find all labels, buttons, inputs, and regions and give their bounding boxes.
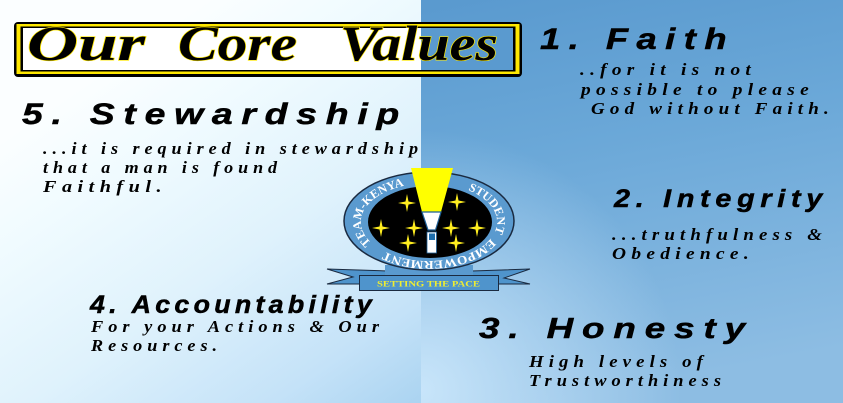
ring lettering: STUDENT: [468, 184, 505, 236]
value 1: Faith: possible to please: [579, 80, 814, 99]
value 2: Integrity: ...truthfulness &: [612, 225, 827, 244]
title text: [27, 15, 498, 71]
value 4: Accountability: 4. Accountability: [89, 291, 376, 319]
title text: Our: [27, 15, 146, 71]
value 1: Faith: ..for it is not: [580, 60, 756, 79]
logo: Student Empowerment Team-Kenya: [326, 168, 530, 291]
value 3: Honesty: High levels of: [528, 352, 708, 371]
value 2: Integrity: [612, 185, 828, 263]
value 1: Faith: God without Faith.: [591, 99, 834, 118]
ring lettering: EMPOWERMENT: [382, 238, 496, 269]
ribbon: [327, 265, 530, 290]
value 2: Integrity: Obedience.: [612, 244, 754, 263]
title text: Core: [178, 15, 297, 71]
flashlight beam: [411, 168, 453, 212]
value 4: Accountability: [89, 291, 384, 355]
value 5: Stewardship: ...it is required in stewardship: [43, 139, 423, 158]
value 1: Faith: [540, 23, 834, 118]
value 4: Accountability: Resources.: [90, 336, 222, 355]
background: left panel: [0, 0, 421, 403]
stars: [372, 193, 486, 252]
background: right panel: [421, 0, 843, 403]
value 5: Stewardship: 5. Stewardship: [22, 98, 408, 131]
title banner: [14, 15, 522, 77]
value 4: Accountability: For your Actions & Our: [90, 317, 384, 336]
title text: Values: [340, 15, 498, 71]
value 5: Stewardship: [22, 98, 423, 196]
value 2: Integrity: 2. Integrity: [613, 185, 828, 213]
flashlight: [422, 212, 441, 253]
ring lettering: TEAM-KENYA: [353, 179, 404, 248]
value 3: Honesty: 3. Honesty: [479, 313, 754, 345]
value 3: Honesty: [479, 313, 754, 390]
value 1: Faith: 1. Faith: [540, 23, 735, 56]
emblem ring: [344, 172, 514, 270]
ribbon: SETTING THE PACE: [377, 278, 480, 288]
value 5: Stewardship: Faithful.: [42, 177, 167, 196]
value 3: Honesty: Trustworthiness: [529, 371, 726, 390]
ring lettering: [353, 179, 505, 269]
value 5: Stewardship: that a man is found: [43, 158, 282, 177]
